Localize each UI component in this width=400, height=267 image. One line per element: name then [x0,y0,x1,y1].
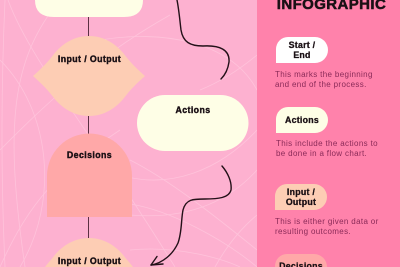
legend tag: input / output: Output [286,197,316,207]
second input/output label: Input / Output [58,256,121,266]
legend description: actions: be done in a flow chart. [276,149,367,158]
decisions label: Decisions [67,150,112,160]
legend description: start / end: and end of the process. [275,80,367,89]
legend tag: input / output: Input / [287,187,315,197]
legend description: input / output: resulting outcomes. [275,227,351,236]
legend tag: actions: Actions [285,115,319,125]
legend description: actions: This include the actions to [276,139,378,148]
legend tag: actions [276,107,328,133]
arrow: start to input/output [85,17,92,46]
arrow: decisions to input/output [85,217,92,248]
input/output flowchart node [33,36,145,116]
legend tag: start / end: End [293,50,311,60]
legend tag: start / end: Start / [289,40,315,50]
curved arrow: actions to input/output [151,166,231,265]
curved arrow: top to actions [177,0,229,79]
second input/output flowchart node [45,238,133,267]
legend description: input / output: This is either given data or [275,217,379,226]
actions label: Actions [175,105,211,115]
legend tag: decisions [275,254,327,267]
legend description: input / output [275,217,379,236]
decisions flowchart node [47,134,132,217]
arrow: input/output to decisions [85,116,92,144]
legend description: start / end [275,70,373,89]
start/end flowchart node [35,0,143,17]
actions flowchart node [137,95,248,151]
legend tag: start / end [276,37,328,63]
legend description: start / end: This marks the beginning [275,70,373,79]
input/output label: Input / Output [58,54,121,64]
legend tag: input / output [275,184,327,210]
legend description: actions [276,139,378,158]
